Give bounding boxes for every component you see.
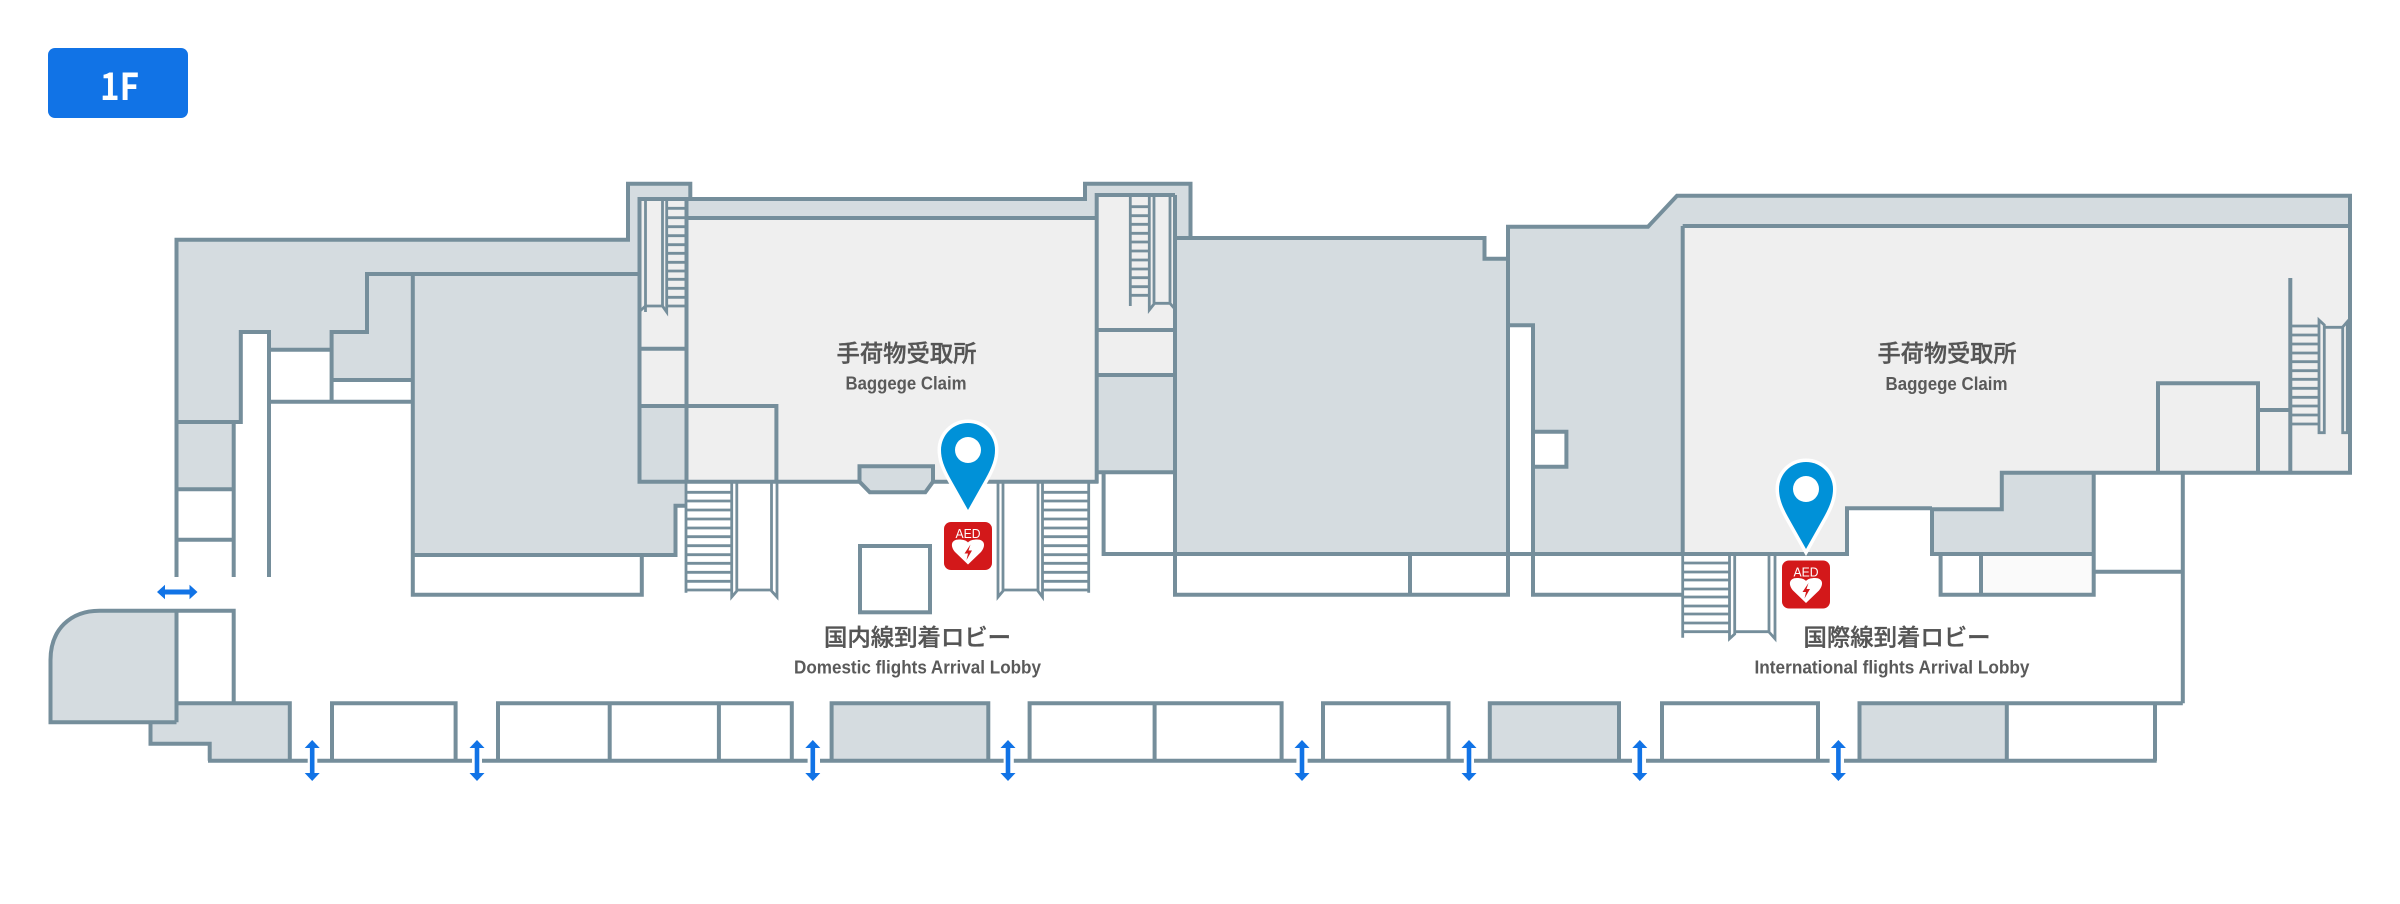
floor plan — [50, 184, 2350, 761]
text: domestic arrival lobby — [794, 624, 1041, 678]
text: international arrival lobby — [1754, 624, 2030, 678]
arrows: south exits — [305, 740, 1846, 781]
text: domestic arrival lobby: 国内線到着ロビー — [824, 624, 1011, 650]
icon: domestic AED: AED — [956, 527, 980, 541]
text: international arrival lobby: International flights Arrival Lobby — [1754, 658, 2030, 678]
icon: domestic AED — [944, 522, 992, 570]
panel: west gray room — [332, 274, 686, 595]
panel: domestic baggage claim — [640, 184, 1190, 492]
text: Baggage Claim international — [1878, 340, 2016, 394]
floor badge: 1F: 1F — [100, 57, 139, 111]
panel: south shops row — [208, 703, 2183, 761]
text: domestic arrival lobby: Domestic flights Arrival Lobby — [794, 658, 1041, 678]
text: Baggage Claim domestic: Baggege Claim — [846, 374, 966, 394]
box: domestic lobby kiosk — [860, 546, 930, 612]
floor badge: 1F — [48, 48, 188, 118]
panel: west rounded building — [50, 611, 290, 761]
icon: domestic location pin — [941, 423, 995, 510]
text: Baggage Claim domestic — [836, 340, 976, 394]
stairs: east side — [2290, 320, 2347, 433]
text: Baggage Claim international: 手荷物受取所 — [1878, 340, 2016, 366]
panel: central block — [1104, 195, 1508, 595]
stairs: upper right — [1130, 195, 1174, 310]
stairs: lower right domestic — [998, 482, 1089, 597]
text: international arrival lobby: 国際線到着ロビー — [1804, 624, 1990, 650]
text: Baggage Claim domestic: 手荷物受取所 — [836, 340, 976, 366]
icon: international AED: AED — [1794, 566, 1818, 580]
stairs: lower left domestic — [686, 482, 777, 597]
icon: international AED — [1782, 560, 1830, 608]
stairs: upper left — [640, 199, 686, 312]
text: Baggage Claim international: Baggege Claim — [1886, 374, 2008, 394]
stairs: lower international — [1683, 554, 1775, 639]
panel: west wing — [176, 184, 690, 577]
arrow: west horizontal passage — [157, 585, 198, 599]
icon: international location pin — [1779, 462, 1833, 549]
panel: international baggage claim — [1508, 196, 2350, 703]
recess kiosk — [860, 466, 933, 492]
